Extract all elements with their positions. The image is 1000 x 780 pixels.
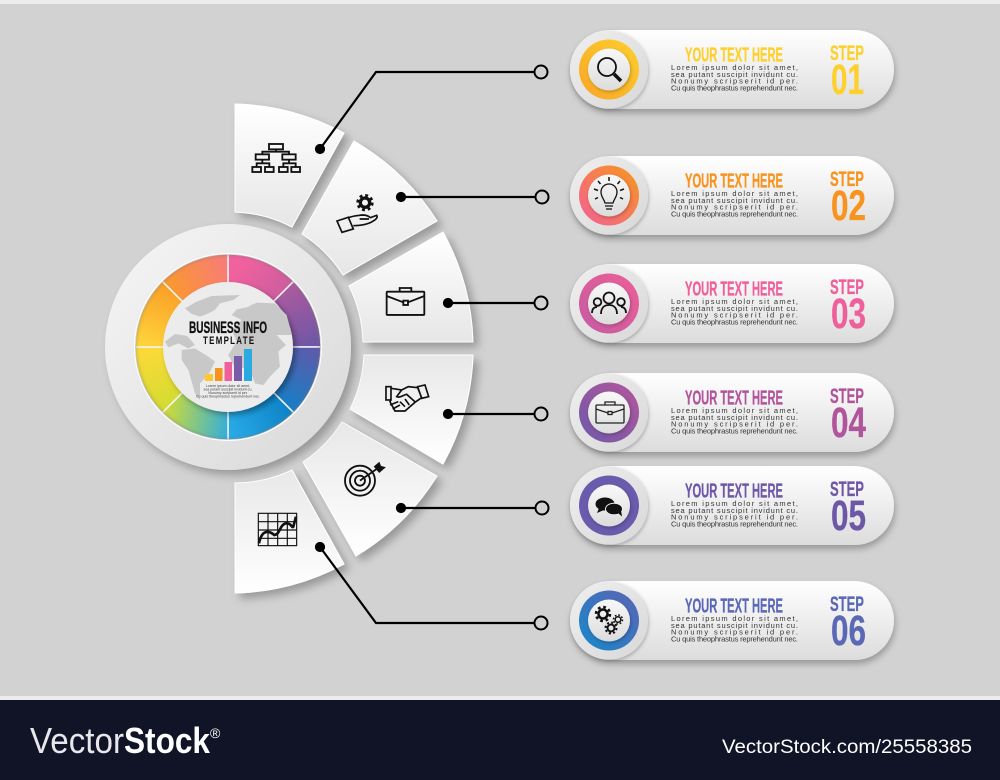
heading: YOUR TEXT HERE	[685, 44, 783, 66]
body text	[671, 499, 798, 528]
body text: Cu quis theophrastus reprehendunt nec.	[671, 318, 798, 326]
body text: Cu quis theophrastus reprehendunt nec.	[671, 520, 798, 528]
body text: Nonumy scripserit id per.	[671, 202, 798, 212]
step label: STEP	[830, 478, 864, 501]
body text: Cu quis theophrastus reprehendunt nec.	[671, 210, 798, 218]
step number: 03	[831, 290, 866, 338]
icon: target	[345, 463, 384, 496]
icon: hand with gear	[337, 196, 377, 232]
icon: chat bubbles	[596, 498, 622, 516]
connector 3	[444, 296, 548, 310]
logo: VectorStock: VectorStock	[30, 720, 222, 761]
subtitle: template: TEMPLATE	[203, 335, 255, 347]
footer band	[0, 696, 1000, 780]
heading: YOUR TEXT HERE	[685, 594, 783, 618]
segment 1	[235, 104, 344, 227]
step number: 06	[831, 607, 866, 655]
icon: people	[592, 292, 626, 314]
caption text: Nonumy scripserit id per.	[208, 391, 248, 395]
panel: step 04	[570, 373, 894, 452]
body text: sea putant suscipit invidunt cu.	[671, 413, 798, 422]
segment 2	[302, 141, 437, 275]
body text	[671, 189, 798, 218]
connector 5	[397, 502, 548, 514]
world map	[165, 295, 292, 400]
body text	[671, 614, 798, 644]
outer ring	[105, 224, 351, 470]
panel: step 05	[570, 466, 894, 545]
image id: VectorStock.com/25558385	[722, 736, 972, 758]
icon: handshake	[386, 385, 429, 411]
body text: Nonumy scripserit id per.	[671, 420, 798, 428]
step number: 05	[831, 492, 866, 540]
body text: Nonumy scripserit id per.	[671, 512, 798, 522]
step number: 04	[831, 399, 866, 447]
panel: step 06	[570, 581, 894, 660]
body text: Lorem ipsum dolor sit amet,	[671, 614, 798, 623]
bar chart	[205, 349, 252, 381]
step label: STEP	[830, 168, 864, 191]
heading: YOUR TEXT HERE	[685, 386, 783, 410]
body text: Cu quis theophrastus reprehendunt nec.	[671, 426, 798, 436]
panel: step 03	[570, 264, 894, 343]
caption text: Lorem ipsum dolor sit amet,	[206, 384, 250, 388]
step label: STEP	[830, 385, 864, 408]
body text: Cu quis theophrastus reprehendunt nec.	[671, 634, 798, 644]
colour ring	[135, 254, 321, 440]
body text: sea putant suscipit invidunt cu.	[671, 621, 798, 630]
step label: STEP	[830, 42, 864, 65]
panel: central wheel	[105, 224, 351, 470]
body text: Lorem ipsum dolor sit amet,	[671, 499, 798, 508]
connector 2	[397, 190, 548, 204]
body text: sea putant suscipit invidunt cu.	[671, 506, 798, 515]
heading: YOUR TEXT HERE	[685, 278, 783, 300]
top light strip	[0, 0, 1000, 4]
body text: Cu quis theophrastus reprehendunt nec.	[671, 84, 798, 92]
body text: sea putant suscipit invidunt cu.	[671, 304, 798, 313]
heading: YOUR TEXT HERE	[685, 170, 783, 192]
connector 4	[444, 408, 548, 420]
step label: STEP	[830, 593, 864, 616]
icon: briefcase	[387, 288, 424, 315]
step label: STEP	[830, 276, 864, 299]
body text: Nonumy scripserit id per.	[671, 310, 798, 320]
connector 1	[316, 66, 548, 153]
body text: Nonumy scripserit id per.	[671, 628, 798, 636]
caption text: Cu quis theophrastus reprehendunt nec.	[196, 394, 260, 398]
body text	[671, 406, 798, 436]
panel: step 02	[570, 156, 894, 235]
caption text	[196, 384, 260, 398]
body text: Lorem ipsum dolor sit amet,	[671, 406, 798, 415]
logo: VectorStock: ®	[210, 725, 221, 741]
panel: step 01	[570, 30, 894, 109]
icon: magnifier	[598, 58, 621, 81]
title: business info: BUSINESS INFO	[189, 319, 267, 337]
body text: Nonumy scripserit id per.	[671, 76, 798, 86]
panel: fan segments	[235, 104, 473, 593]
body text: Lorem ipsum dolor sit amet,	[671, 297, 798, 306]
icon: org chart	[252, 144, 300, 172]
segment 5	[303, 422, 437, 556]
icon: light bulb	[594, 177, 624, 209]
segment 6	[235, 470, 344, 593]
body text	[671, 297, 798, 326]
icon: gears	[596, 607, 622, 634]
segment 4	[350, 355, 473, 464]
icon: briefcase	[596, 402, 624, 423]
centre disc	[163, 282, 293, 412]
body text: sea putant suscipit invidunt cu.	[671, 70, 798, 79]
body text: Lorem ipsum dolor sit amet,	[671, 63, 798, 72]
connector 6	[316, 543, 548, 630]
caption text: sea putant suscipit invidunt cu.	[204, 388, 252, 392]
body text: Lorem ipsum dolor sit amet,	[671, 189, 798, 198]
step number: 01	[831, 56, 864, 104]
step number: 02	[831, 182, 866, 230]
body text	[671, 63, 798, 92]
heading: YOUR TEXT HERE	[685, 480, 783, 502]
icon: line chart	[258, 513, 297, 546]
segment 3	[349, 232, 473, 342]
body text: sea putant suscipit invidunt cu.	[671, 196, 798, 205]
